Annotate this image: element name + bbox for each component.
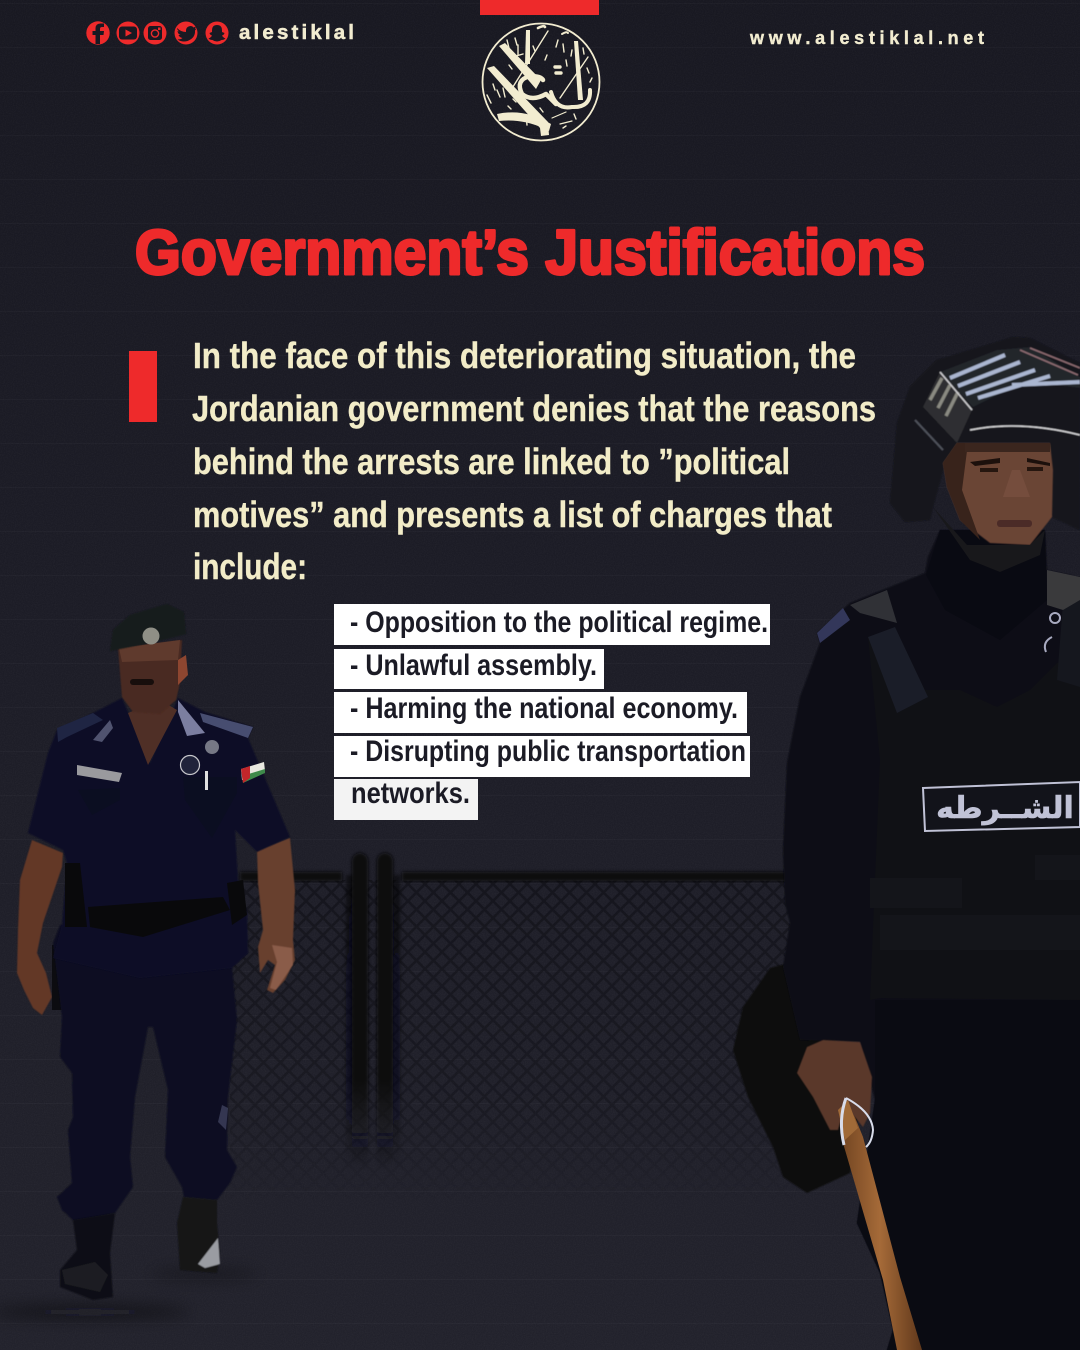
right hand [797,1040,872,1130]
intro paragraph: include: [193,546,307,587]
police vest label: الشــرطه [936,791,1074,826]
chain-link fence [230,852,790,1160]
shirt [28,698,290,978]
charge 4: - Disrupting public transportation [350,735,746,768]
charge 2 [334,649,604,689]
icon: instagram [144,22,166,44]
baton grip [838,1100,858,1140]
charge 3: - Harming the national economy. [350,692,738,725]
forehead and moustache [119,640,180,685]
belt and holster [65,863,247,937]
uniform badges [1045,613,1060,652]
shoulder straps [817,570,1080,713]
chest badges [180,740,219,790]
intro paragraph: In the face of this deteriorating situation, the [193,335,856,376]
knee highlight [218,1105,228,1130]
charge 1 [334,604,770,645]
intro paragraph: behind the arrests are linked to ”political [193,441,790,482]
trousers [857,1000,1080,1350]
skin at neck [128,700,177,765]
trousers [53,920,248,1222]
face [118,640,182,714]
beret [110,604,186,651]
charge 4 continued [334,777,478,820]
ground shadow [0,1271,260,1318]
epaulettes and collar [57,700,253,742]
boots [60,1197,220,1300]
face shadow and features [943,443,1050,540]
face [943,443,1053,545]
jordan flag patch [241,762,265,783]
photo: officer walking [0,604,295,1318]
beret badge [142,628,160,644]
baton [838,1100,922,1350]
charge 2: - Unlawful assembly. [350,649,597,682]
intro paragraph [192,335,876,587]
wrist cord [841,1098,873,1147]
website url: www.alestiklal.net [749,28,984,48]
vest lower panels [870,855,1080,950]
icon: youtube [116,22,140,44]
red top bar [480,0,599,15]
charge 4 continued: networks. [351,777,470,810]
icon: facebook [86,21,110,45]
neck and collar [926,530,1047,640]
helmet [890,337,1080,530]
social icons [86,21,228,45]
pouch on belt [733,960,860,1193]
social handle: alestiklal [239,21,354,44]
list of charges [334,604,770,820]
pocket flaps [78,777,237,838]
icon: snapchat [206,22,228,44]
holster behind hip [52,945,66,1010]
charge 3 [334,692,747,733]
photo: riot police officer [733,337,1080,1350]
logo: calligraphic roundel [482,24,600,140]
charge 4 [334,735,750,777]
ear [178,655,188,685]
intro paragraph: motives” and presents a list of charges that [193,494,832,535]
title: Government’s Justifications [135,218,925,288]
name tag [77,765,122,782]
intro paragraph: Jordanian government denies that the reasons [192,388,876,429]
charge 1: - Opposition to the political regime. [350,606,768,639]
red accent block [129,351,157,422]
icon: twitter [174,22,198,44]
vest [868,627,1080,1000]
police vest label [923,782,1080,831]
arms [17,838,295,1015]
chin strap [933,507,1045,572]
uniform body [783,530,1080,1350]
